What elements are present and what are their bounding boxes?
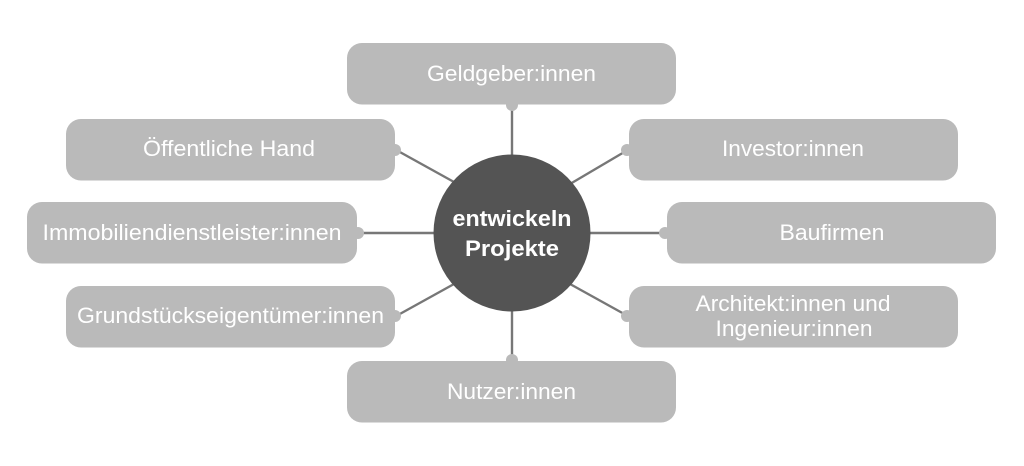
box: Geldgeber:innen xyxy=(347,43,676,104)
box: Öffentliche Hand xyxy=(66,119,395,180)
box: Investor:innen: Investor:innen xyxy=(722,136,864,161)
box: Architekt:innen und Ingenieur:innen: Ingenieur:innen xyxy=(716,316,872,341)
box: Geldgeber:innen: Geldgeber:innen xyxy=(427,61,596,86)
connector: Investor xyxy=(570,144,633,184)
box: Öffentliche Hand: Öffentliche Hand xyxy=(143,136,315,161)
box: Architekt:innen und Ingenieur:innen: Architekt:innen und xyxy=(696,291,890,316)
box: Grundstückseigentümer:innen: Grundstückseigentümer:innen xyxy=(77,303,384,328)
center circle: entwickeln Projekte xyxy=(434,154,590,312)
connector: Baufirmen xyxy=(585,227,671,239)
box: Nutzer:innen: Nutzer:innen xyxy=(447,379,576,404)
box: Grundstückseigentümer:innen xyxy=(66,286,395,348)
connector: Immobilien xyxy=(352,227,440,239)
connector: Geldgeber xyxy=(506,99,518,160)
box: Baufirmen xyxy=(667,202,996,264)
box: Immobiliendienstleister:innen: Immobiliendienstleister:innen xyxy=(42,220,342,245)
box: Baufirmen: Baufirmen xyxy=(780,220,884,245)
box: Investor:innen xyxy=(629,119,958,180)
connector: Nutzer xyxy=(506,305,518,366)
connector: Grundstück xyxy=(389,284,454,322)
box: Nutzer:innen xyxy=(347,361,676,422)
center circle: entwickeln Projekte: Projekte xyxy=(465,236,559,261)
connector: Öffentliche Hand xyxy=(389,144,454,182)
box: Immobiliendienstleister:innen xyxy=(27,202,357,264)
connector: Architekt xyxy=(570,284,633,322)
center circle: entwickeln Projekte: entwickeln xyxy=(452,206,572,231)
box: Architekt:innen und Ingenieur:innen xyxy=(629,286,958,348)
